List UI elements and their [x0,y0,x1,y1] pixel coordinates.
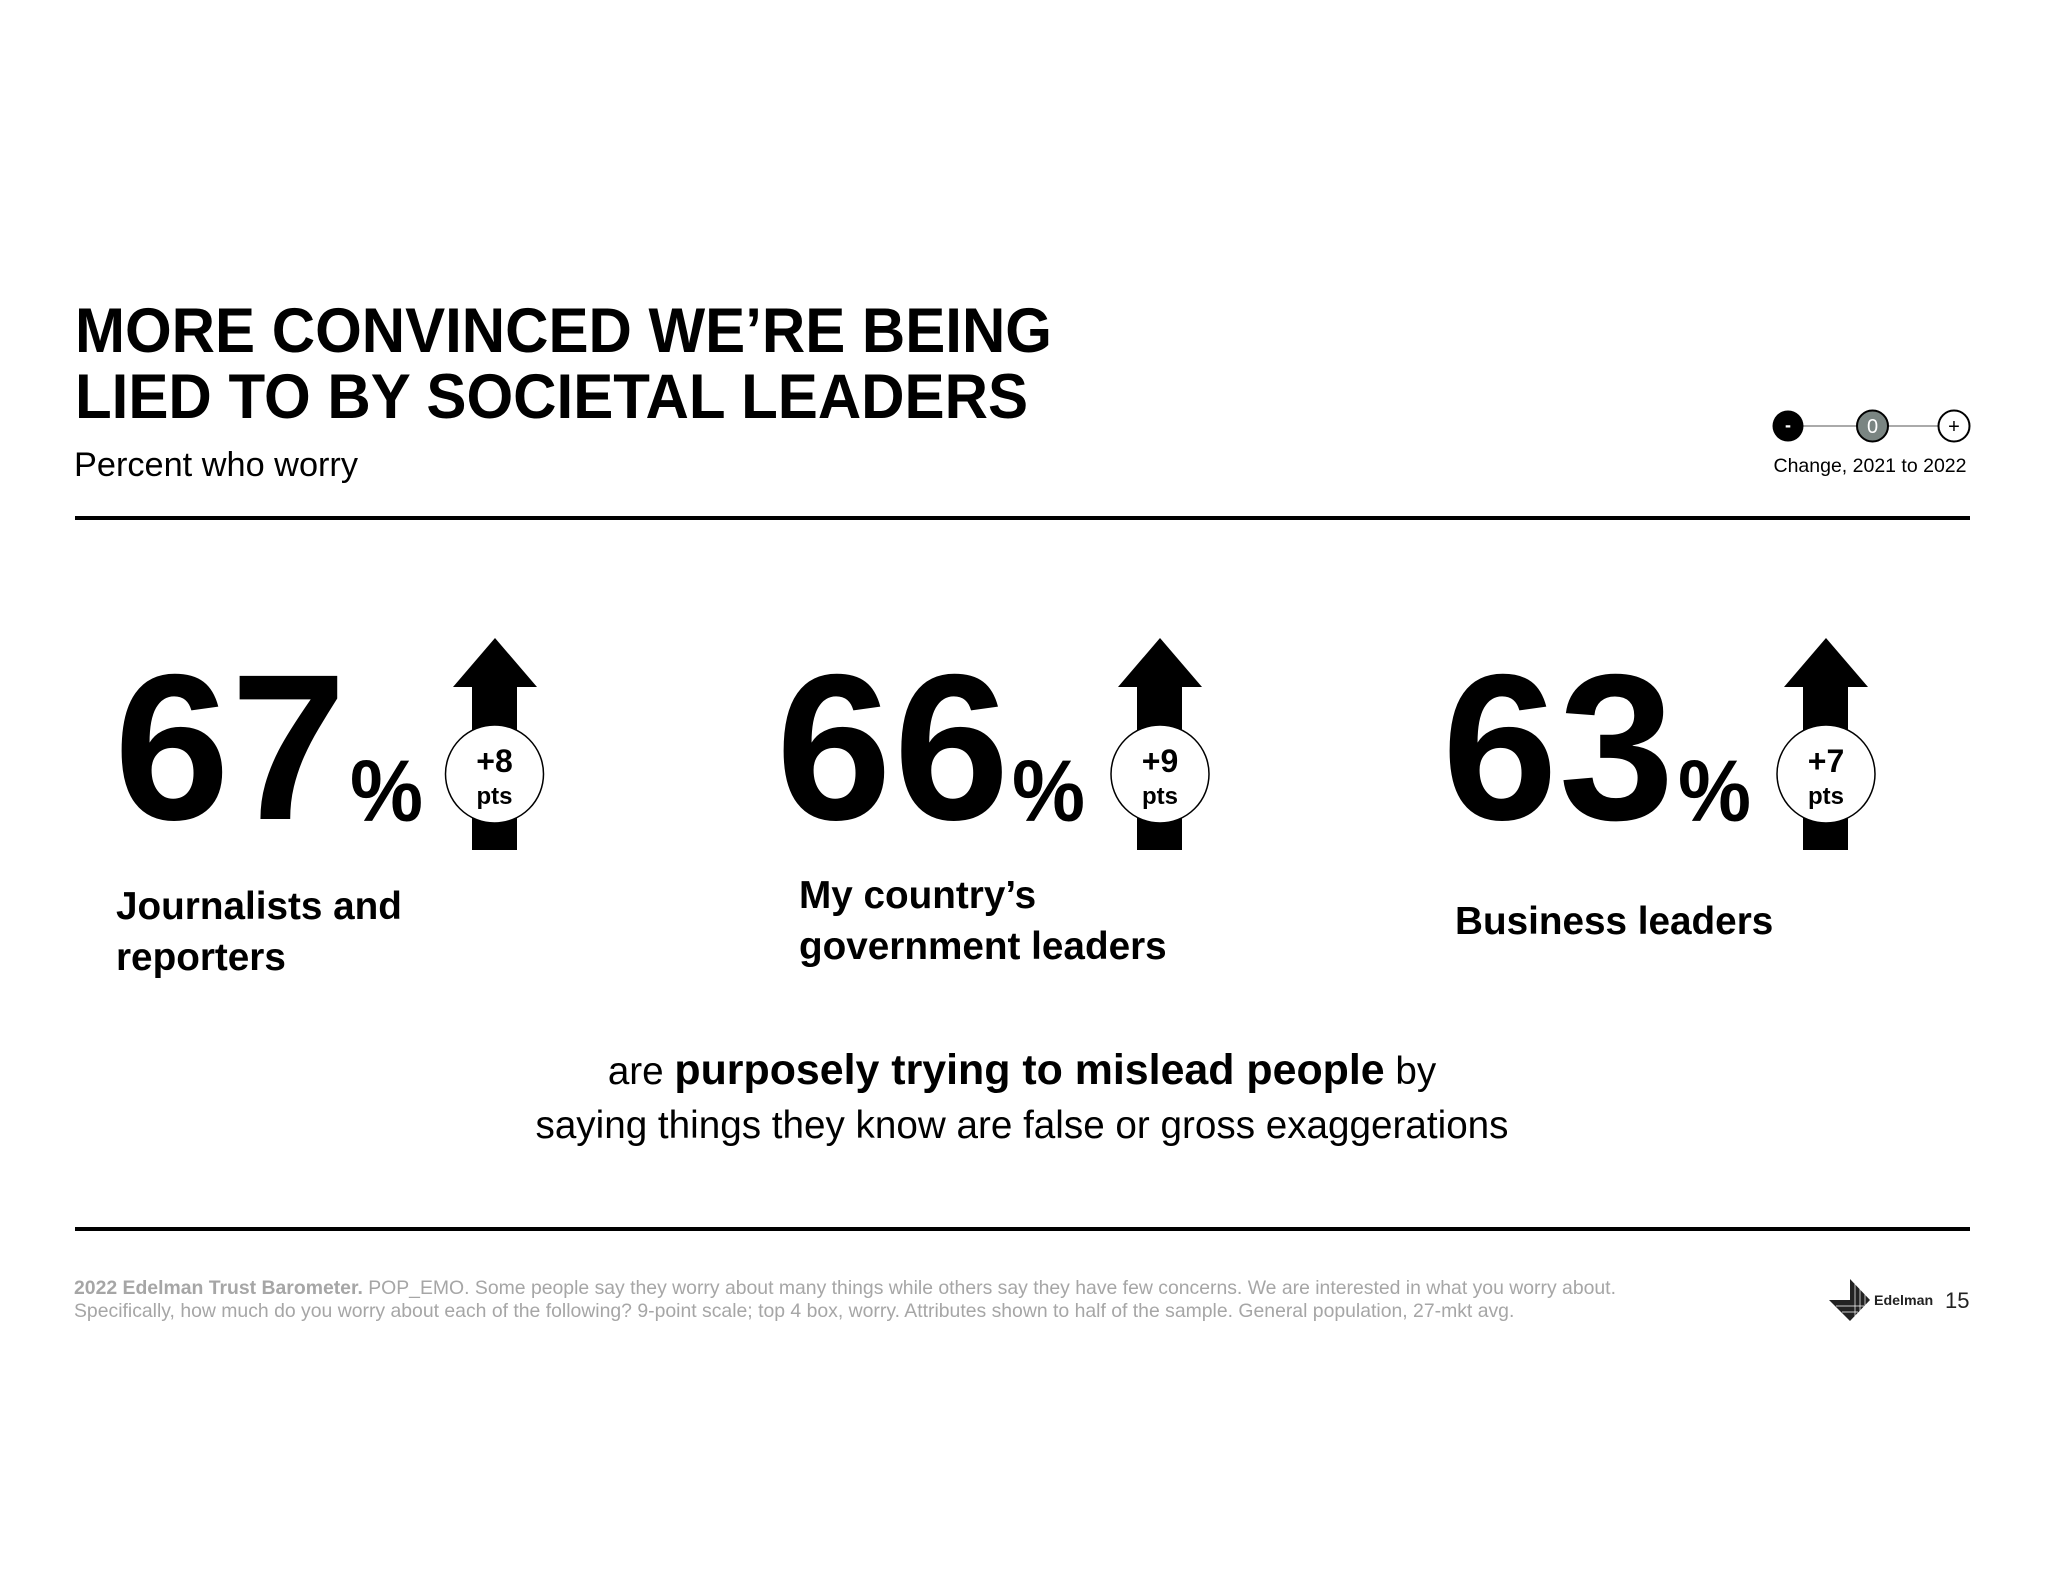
legend: change scale [1772,410,1970,477]
legend: change scale: Change, 2021 to 2022 [1773,455,1967,477]
explanatory statement: are purposely trying to mislead people by [608,1046,1437,1094]
title [75,296,1052,432]
change badge +9 pts [1111,725,1209,823]
change badge +9 pts: +9 [1142,743,1178,779]
legend: change scale: - [1785,415,1791,435]
label [799,874,1167,968]
subtitle: Percent who worry [74,446,359,484]
change badge +7 pts: pts [1808,783,1844,810]
footnote: Specifically, how much do you worry about each of the following? 9-point scale; top 4 box, worry. Attributes shown to half of the sample. General population, 27-mkt avg. [74,1300,1514,1322]
change badge +9 pts: pts [1142,783,1178,810]
arrow up [453,638,537,850]
arrow up [1784,638,1868,850]
label: government leaders [799,925,1167,968]
arrow up [1118,638,1202,850]
change badge +8 pts [446,725,544,823]
change badge +7 pts [1777,725,1875,823]
explanatory statement [536,1046,1508,1147]
label: My country’s [799,874,1036,917]
value 66: 66 [776,632,1011,864]
explanatory statement: saying things they know are false or gross exaggerations [536,1104,1508,1147]
change badge +8 pts: +8 [476,743,513,779]
title: MORE CONVINCED WE’RE BEING [75,296,1052,366]
change badge +7 pts: +7 [1808,743,1844,779]
value 67: 67 [114,632,347,864]
logo: Edelman: Edelman [1874,1293,1933,1309]
label: reporters [116,936,286,979]
title: LIED TO BY SOCIETAL LEADERS [75,362,1028,432]
stat: business 63% [1442,632,1875,943]
footnote: 2022 Edelman Trust Barometer. POP_EMO. Some people say they worry about many things while others say they have few concerns. We are interested in what you worry about. [74,1277,1616,1299]
legend: change scale: + [1948,416,1960,438]
stat: journalists 67% [114,632,544,979]
label: Business leaders [1455,900,1773,943]
percent sign: % [1678,743,1751,840]
page number: 15 [1945,1288,1969,1313]
percent sign: % [1012,743,1085,840]
stat: government 66% [776,632,1209,968]
change badge +8 pts: pts [476,783,512,810]
label: Journalists and [116,885,402,928]
value 63: 63 [1442,632,1675,864]
label [116,885,402,979]
percent sign: % [350,743,423,840]
legend: change scale: 0 [1867,416,1878,438]
logo: Edelman [1829,1279,1933,1321]
footnote [74,1277,1616,1322]
